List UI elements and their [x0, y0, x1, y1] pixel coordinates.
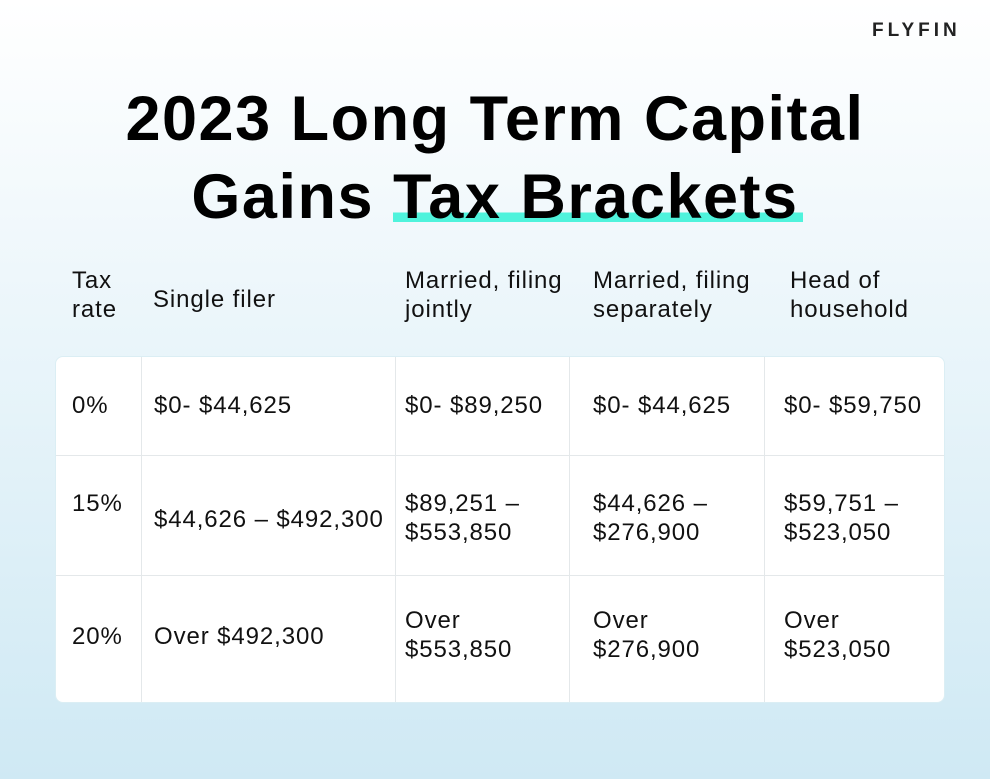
- table panel: $59,751 –: [784, 490, 899, 517]
- table panel: $0- $44,625: [154, 392, 292, 419]
- table panel: Over: [593, 607, 649, 634]
- title: [125, 84, 864, 232]
- table panel: $44,626 –: [593, 490, 708, 517]
- table headers: Tax: [72, 267, 112, 294]
- table panel: $276,900: [593, 519, 700, 546]
- table panel: $0- $59,750: [784, 392, 922, 419]
- table panel: Over $492,300: [154, 623, 324, 650]
- table panel: $553,850: [405, 636, 512, 663]
- table panel: $0- $89,250: [405, 392, 543, 419]
- table panel: [55, 356, 945, 703]
- table headers: rate: [72, 296, 117, 323]
- table panel: $0- $44,625: [593, 392, 731, 419]
- table panel: $89,251 –: [405, 490, 520, 517]
- table panel: $523,050: [784, 519, 891, 546]
- title: Gains Tax Brackets: [191, 162, 799, 232]
- row 15%: 15%: [72, 490, 123, 517]
- table headers: Married, filing: [405, 267, 563, 294]
- title: 2023 Long Term Capital: [125, 84, 864, 154]
- table panel: Over: [405, 607, 461, 634]
- table headers: Head of: [790, 267, 880, 294]
- table panel: $523,050: [784, 636, 891, 663]
- row 0%: 0%: [72, 392, 108, 419]
- table headers: Single filer: [153, 286, 276, 313]
- table panel: Over: [784, 607, 840, 634]
- table headers: separately: [593, 296, 713, 323]
- table headers: [72, 267, 909, 323]
- table headers: household: [790, 296, 909, 323]
- table panel: $553,850: [405, 519, 512, 546]
- row 20%: 20%: [72, 623, 123, 650]
- table panel: $276,900: [593, 636, 700, 663]
- table headers: jointly: [405, 296, 473, 323]
- logo: FLYFIN: [872, 20, 961, 41]
- table panel: $44,626 – $492,300: [154, 506, 384, 533]
- table headers: Married, filing: [593, 267, 751, 294]
